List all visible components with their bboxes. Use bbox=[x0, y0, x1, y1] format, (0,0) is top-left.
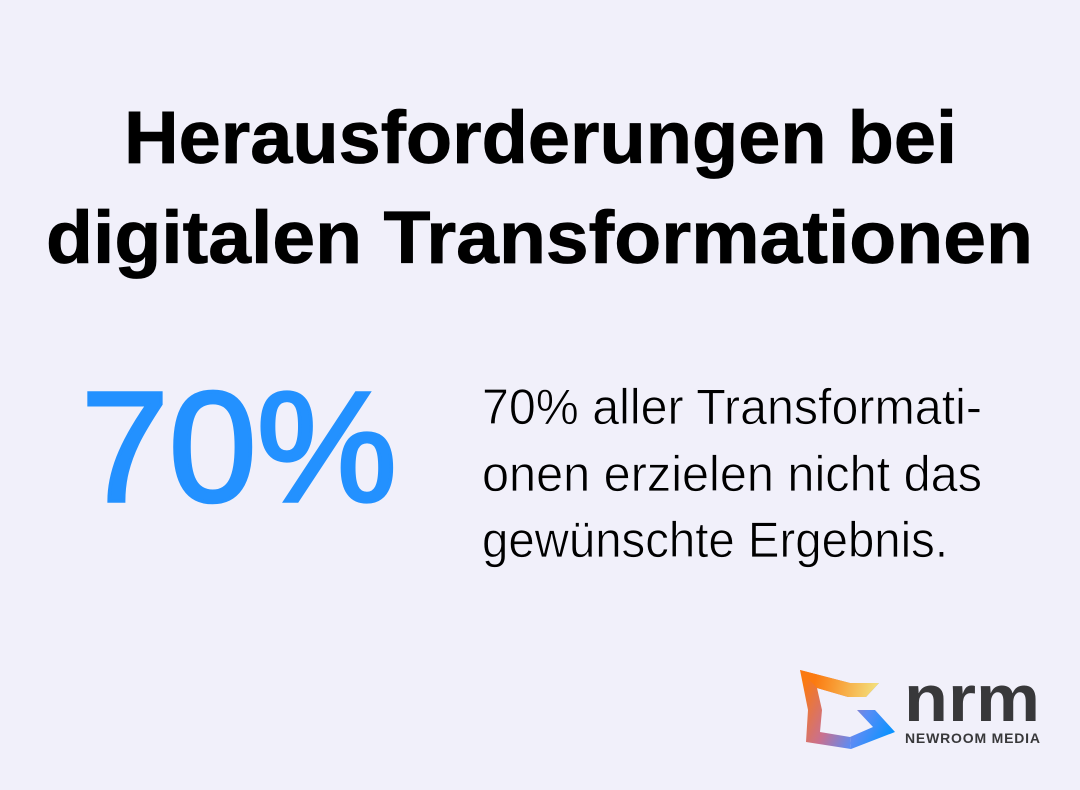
icon: logo mark bbox=[800, 670, 895, 749]
title: digitalen Transformationen bbox=[46, 196, 1033, 279]
title bbox=[46, 96, 1033, 279]
title: Herausforderungen bei bbox=[124, 96, 957, 179]
statistic description: gewünschte Ergebnis. bbox=[482, 512, 948, 568]
logo: Newroom Media bbox=[800, 661, 1040, 749]
statistic description: onen erzielen nicht das bbox=[482, 446, 982, 502]
statistic description bbox=[482, 379, 982, 568]
logo wordmark: nrm bbox=[904, 661, 1040, 735]
big statistic: 70%: 70% bbox=[81, 360, 397, 535]
statistic description: 70% aller Transformati- bbox=[482, 379, 982, 435]
logo tagline: NEWROOM MEDIA bbox=[905, 730, 1040, 746]
